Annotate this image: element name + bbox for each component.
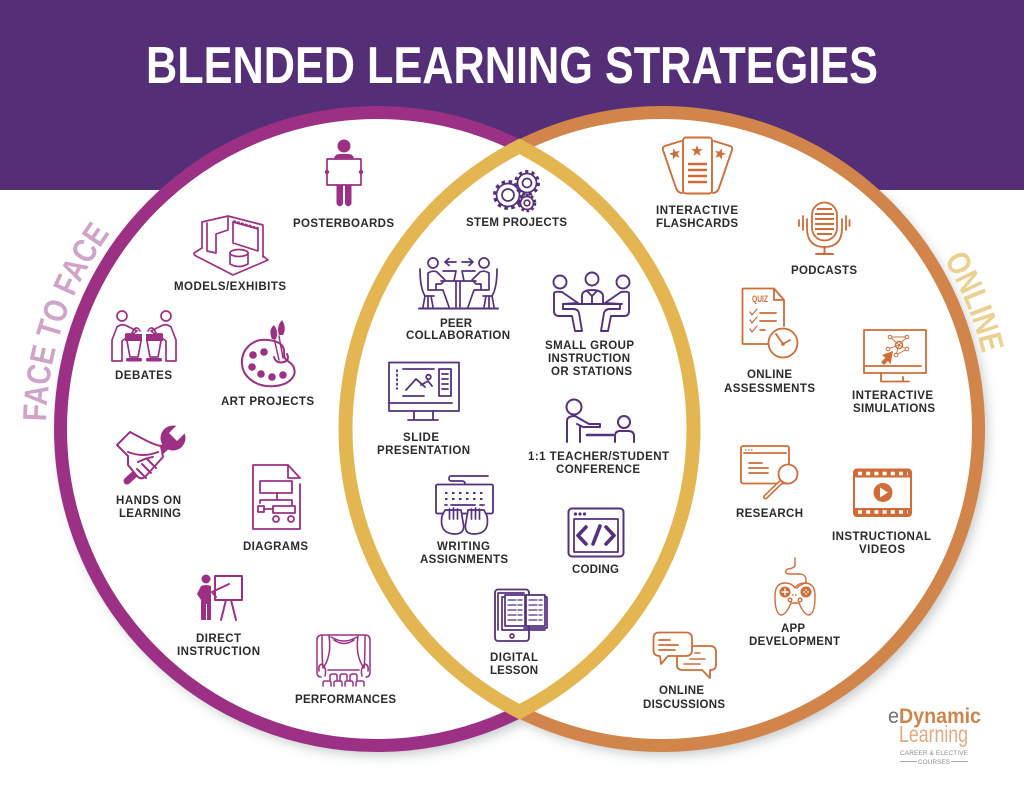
- item: debates: [112, 311, 176, 382]
- label: [749, 623, 840, 648]
- item: interactive simulations: [852, 330, 935, 415]
- label: MODELS/EXHIBITS: [174, 281, 286, 293]
- icon: chat bubbles: [654, 632, 716, 678]
- item: slide presentation: [377, 362, 470, 457]
- label: INSTRUCTIONAL: [832, 531, 931, 543]
- header band: [0, 0, 1024, 190]
- item: teacher student conference: [528, 400, 669, 476]
- label: SMALL GROUP: [545, 340, 634, 352]
- logo: CAREER & ELECTIVE: [900, 750, 969, 757]
- label: ONLINE: [659, 685, 704, 697]
- item: posterboards: [293, 140, 394, 230]
- item: small group instruction: [545, 272, 634, 378]
- label: [545, 340, 634, 378]
- icon: gears: [494, 172, 538, 211]
- label: [852, 390, 935, 415]
- item: hands on learning: [116, 419, 191, 520]
- label: ASSIGNMENTS: [420, 554, 508, 566]
- icon: two people at podiums: [112, 311, 176, 362]
- center overlap lens: [346, 146, 693, 712]
- item: direct instruction: [177, 574, 260, 658]
- label: DIGITAL: [490, 652, 538, 664]
- right circle ring: [520, 112, 979, 746]
- item: instructional videos: [832, 470, 931, 556]
- icon: game controller: [775, 558, 815, 615]
- logo: Learning: [899, 721, 968, 747]
- label: SLIDE: [403, 432, 439, 444]
- label: INSTRUCTION: [177, 646, 260, 658]
- label: [724, 369, 815, 395]
- label: [528, 451, 669, 476]
- label: INTERACTIVE: [852, 390, 933, 402]
- label: INSTRUCTION: [548, 353, 630, 365]
- item: online assessments: [724, 288, 815, 395]
- label: RESEARCH: [736, 508, 803, 520]
- icon: monitor with slide: [389, 362, 459, 420]
- title: BLENDED LEARNING STRATEGIES: [146, 37, 878, 95]
- icon: person holding poster: [325, 140, 363, 206]
- label: DEVELOPMENT: [749, 636, 840, 648]
- label: [656, 205, 738, 230]
- label: FLASHCARDS: [656, 218, 738, 230]
- icon: exhibit booth: [194, 216, 268, 275]
- label: POSTERBOARDS: [293, 218, 394, 230]
- label: COLLABORATION: [406, 330, 510, 342]
- icon: three people at table: [554, 272, 630, 331]
- item: online discussions: [643, 632, 725, 711]
- item: stem projects: [466, 172, 567, 229]
- label: LESSON: [490, 665, 538, 677]
- label: SIMULATIONS: [853, 403, 935, 415]
- label: ASSESSMENTS: [724, 383, 815, 395]
- logo: [888, 705, 981, 766]
- label: ART PROJECTS: [221, 396, 314, 408]
- label: ONLINE: [747, 369, 792, 381]
- label: CONFERENCE: [556, 464, 640, 476]
- logo: eDynamic: [888, 705, 981, 728]
- icon: teacher and student at desk: [566, 400, 634, 442]
- label: [116, 495, 181, 520]
- icon: flashcards: [663, 138, 732, 194]
- icon: code window: [568, 508, 624, 556]
- item: writing assignments: [420, 476, 508, 566]
- icon: tablet with book: [495, 590, 547, 641]
- icon: two people at table: [419, 258, 498, 308]
- item: art projects: [221, 320, 314, 408]
- item: app development: [749, 558, 840, 648]
- label: PEER: [440, 318, 473, 330]
- icon: quiz and clock: QUIZ: [752, 294, 768, 304]
- item: performances: [295, 635, 396, 706]
- item: research: [736, 446, 803, 520]
- label: PODCASTS: [791, 265, 857, 277]
- label: [643, 685, 725, 711]
- item: diagrams: [243, 465, 308, 553]
- label: [406, 318, 510, 342]
- label: INTERACTIVE: [656, 205, 738, 217]
- item: models/exhibits: [174, 216, 286, 293]
- label: 1:1 TEACHER/STUDENT: [528, 451, 669, 463]
- label: LEARNING: [119, 508, 181, 520]
- label: VIDEOS: [859, 544, 905, 556]
- icon: theater stage: [317, 635, 370, 686]
- icon: flowchart document: [253, 465, 300, 529]
- icon: hands on keyboard: [436, 476, 493, 534]
- item: digital lesson: [490, 590, 547, 677]
- label: DIRECT: [196, 633, 241, 645]
- icon: hand gripping wrench: [117, 419, 191, 481]
- label: [490, 652, 538, 677]
- icon: monitor with network: [864, 330, 926, 382]
- heading: online: ONLINE: [948, 252, 1004, 353]
- label: WRITING: [437, 541, 490, 553]
- icon: paint palette: [242, 320, 295, 386]
- label: [177, 633, 260, 658]
- label: STEM PROJECTS: [466, 217, 567, 229]
- icon: teacher with board: [197, 574, 242, 620]
- item: interactive flashcards: [656, 138, 738, 230]
- item: coding: [568, 508, 624, 576]
- label: [377, 432, 470, 457]
- label: HANDS ON: [116, 495, 181, 507]
- label: OR STATIONS: [551, 366, 632, 378]
- label: PRESENTATION: [377, 445, 470, 457]
- label: DIAGRAMS: [243, 541, 308, 553]
- label: CODING: [572, 564, 619, 576]
- label: [832, 531, 931, 556]
- heading: face to face: FACE TO FACE: [23, 222, 110, 420]
- left circle: face to face: [60, 112, 694, 746]
- item: peer collaboration: [406, 258, 510, 342]
- label: [420, 541, 508, 566]
- label: APP: [781, 623, 805, 635]
- right circle: online: [346, 112, 979, 746]
- icon: film strip: [854, 470, 911, 516]
- label: DEBATES: [115, 370, 172, 382]
- label: PERFORMANCES: [295, 694, 396, 706]
- icon: microphone: [799, 202, 850, 254]
- label: DISCUSSIONS: [643, 699, 725, 711]
- logo: COURSES: [918, 759, 951, 766]
- circle shadows: [60, 113, 987, 755]
- icon: browser and magnifier: [741, 446, 798, 497]
- item: podcasts: [791, 202, 857, 277]
